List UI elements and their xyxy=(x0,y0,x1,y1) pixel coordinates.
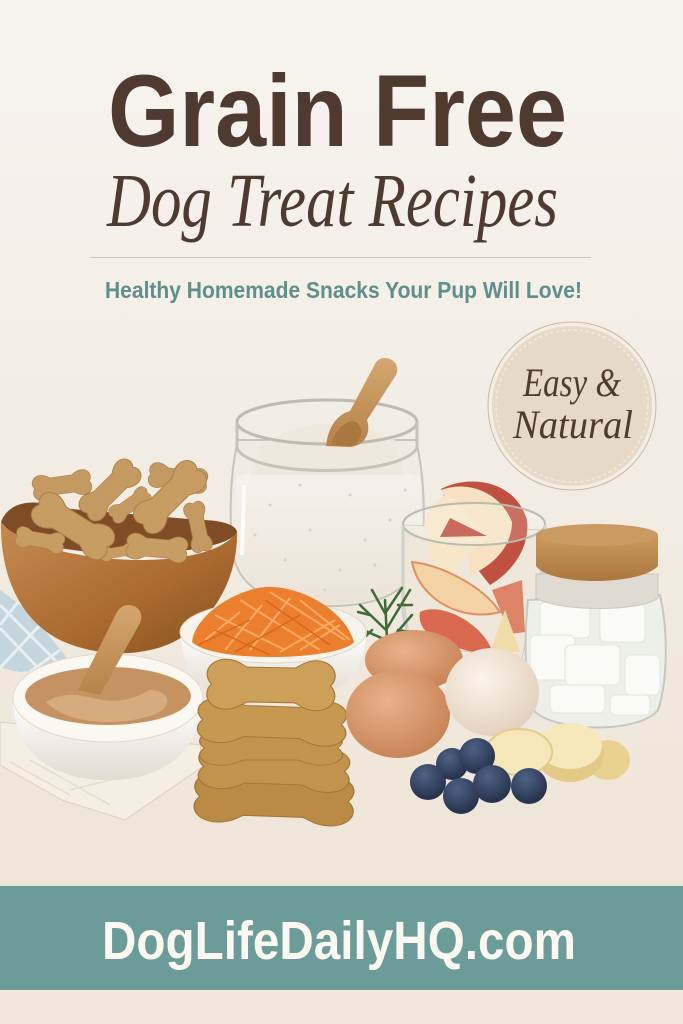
table surface xyxy=(0,558,683,1024)
website: DogLifeDailyHQ.com xyxy=(102,911,576,971)
checked cloth xyxy=(0,590,205,820)
spoon xyxy=(78,605,141,695)
wooden bowl with bones xyxy=(1,455,237,653)
eggs xyxy=(346,630,539,758)
badge: Easy & Natural: Natural xyxy=(512,402,633,447)
banana slices xyxy=(486,723,630,782)
title xyxy=(106,54,567,243)
stack of bone biscuits xyxy=(194,659,354,827)
herbs xyxy=(352,588,412,658)
heading: Dog Treat Recipes: Dog Treat Recipes xyxy=(106,159,558,243)
wooden scoop in flour xyxy=(326,358,397,447)
badge: Easy & Natural: Easy & xyxy=(522,360,621,405)
flour jar xyxy=(231,400,424,606)
badge: Easy & Natural xyxy=(488,322,656,490)
carrot bowl xyxy=(180,587,367,698)
blueberries xyxy=(410,738,547,814)
peanut butter bowl xyxy=(13,605,203,780)
jar with coconut oil and wooden lid xyxy=(526,524,666,728)
heading: Grain Free: Grain Free xyxy=(108,54,567,168)
apple jar xyxy=(403,481,545,658)
footer band xyxy=(0,886,683,990)
subtitle: Healthy Homemade Snacks Your Pup Will Love! xyxy=(105,277,582,303)
